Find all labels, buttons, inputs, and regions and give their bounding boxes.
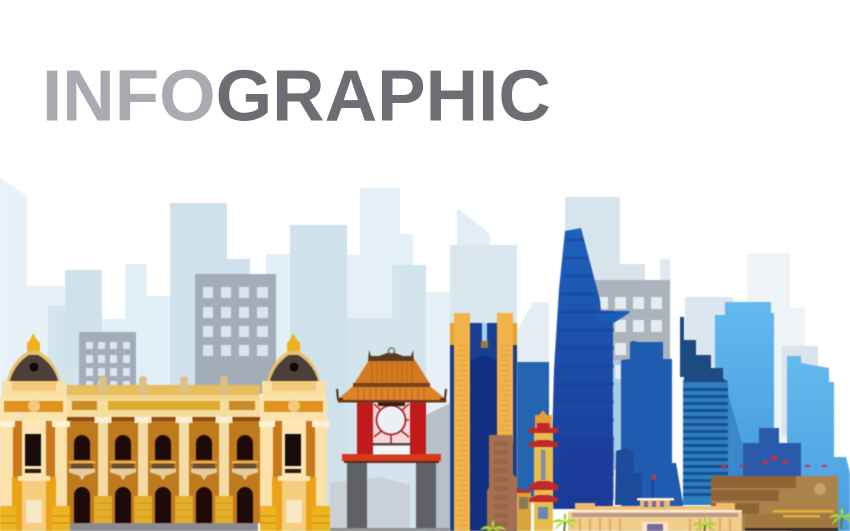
stepped striped tower <box>680 317 728 505</box>
temple tower <box>529 410 558 531</box>
pagoda gate <box>330 348 450 531</box>
opera columns <box>94 376 233 523</box>
gray buildings behind gate <box>330 403 450 531</box>
blue mid tower <box>621 341 683 530</box>
gate beam <box>342 454 441 463</box>
gray building: centre <box>195 274 276 394</box>
Bitexco tower <box>551 228 630 509</box>
gate roof <box>337 348 447 402</box>
tower shadow <box>724 380 752 478</box>
colonial palace <box>568 498 742 531</box>
small temple <box>517 487 531 531</box>
gray building: left <box>79 332 136 392</box>
ground strip <box>330 528 450 531</box>
opera centre block <box>67 385 260 523</box>
gray building: right <box>594 280 670 470</box>
flag <box>652 475 656 506</box>
gate pillars <box>347 462 436 531</box>
red lanterns row <box>721 456 827 468</box>
dark pagoda silhouette <box>615 446 642 505</box>
light blue tower right <box>787 356 850 531</box>
red columns and lattice <box>357 402 426 454</box>
opera steps <box>70 523 258 531</box>
modern towers <box>517 228 850 531</box>
opera left wing <box>0 333 70 531</box>
opera bays <box>69 435 258 523</box>
opera house <box>0 333 330 531</box>
brown low building <box>711 476 838 531</box>
palm trees <box>480 508 850 531</box>
small navy building <box>743 428 801 479</box>
light blue tower <box>715 302 774 453</box>
title: INFOGRAPHIC <box>42 56 551 136</box>
brown tower <box>487 435 517 531</box>
blue building behind gold tower <box>517 362 549 497</box>
opera right wing <box>259 333 330 531</box>
pale background skyline <box>0 178 818 531</box>
gold tower <box>450 313 517 531</box>
